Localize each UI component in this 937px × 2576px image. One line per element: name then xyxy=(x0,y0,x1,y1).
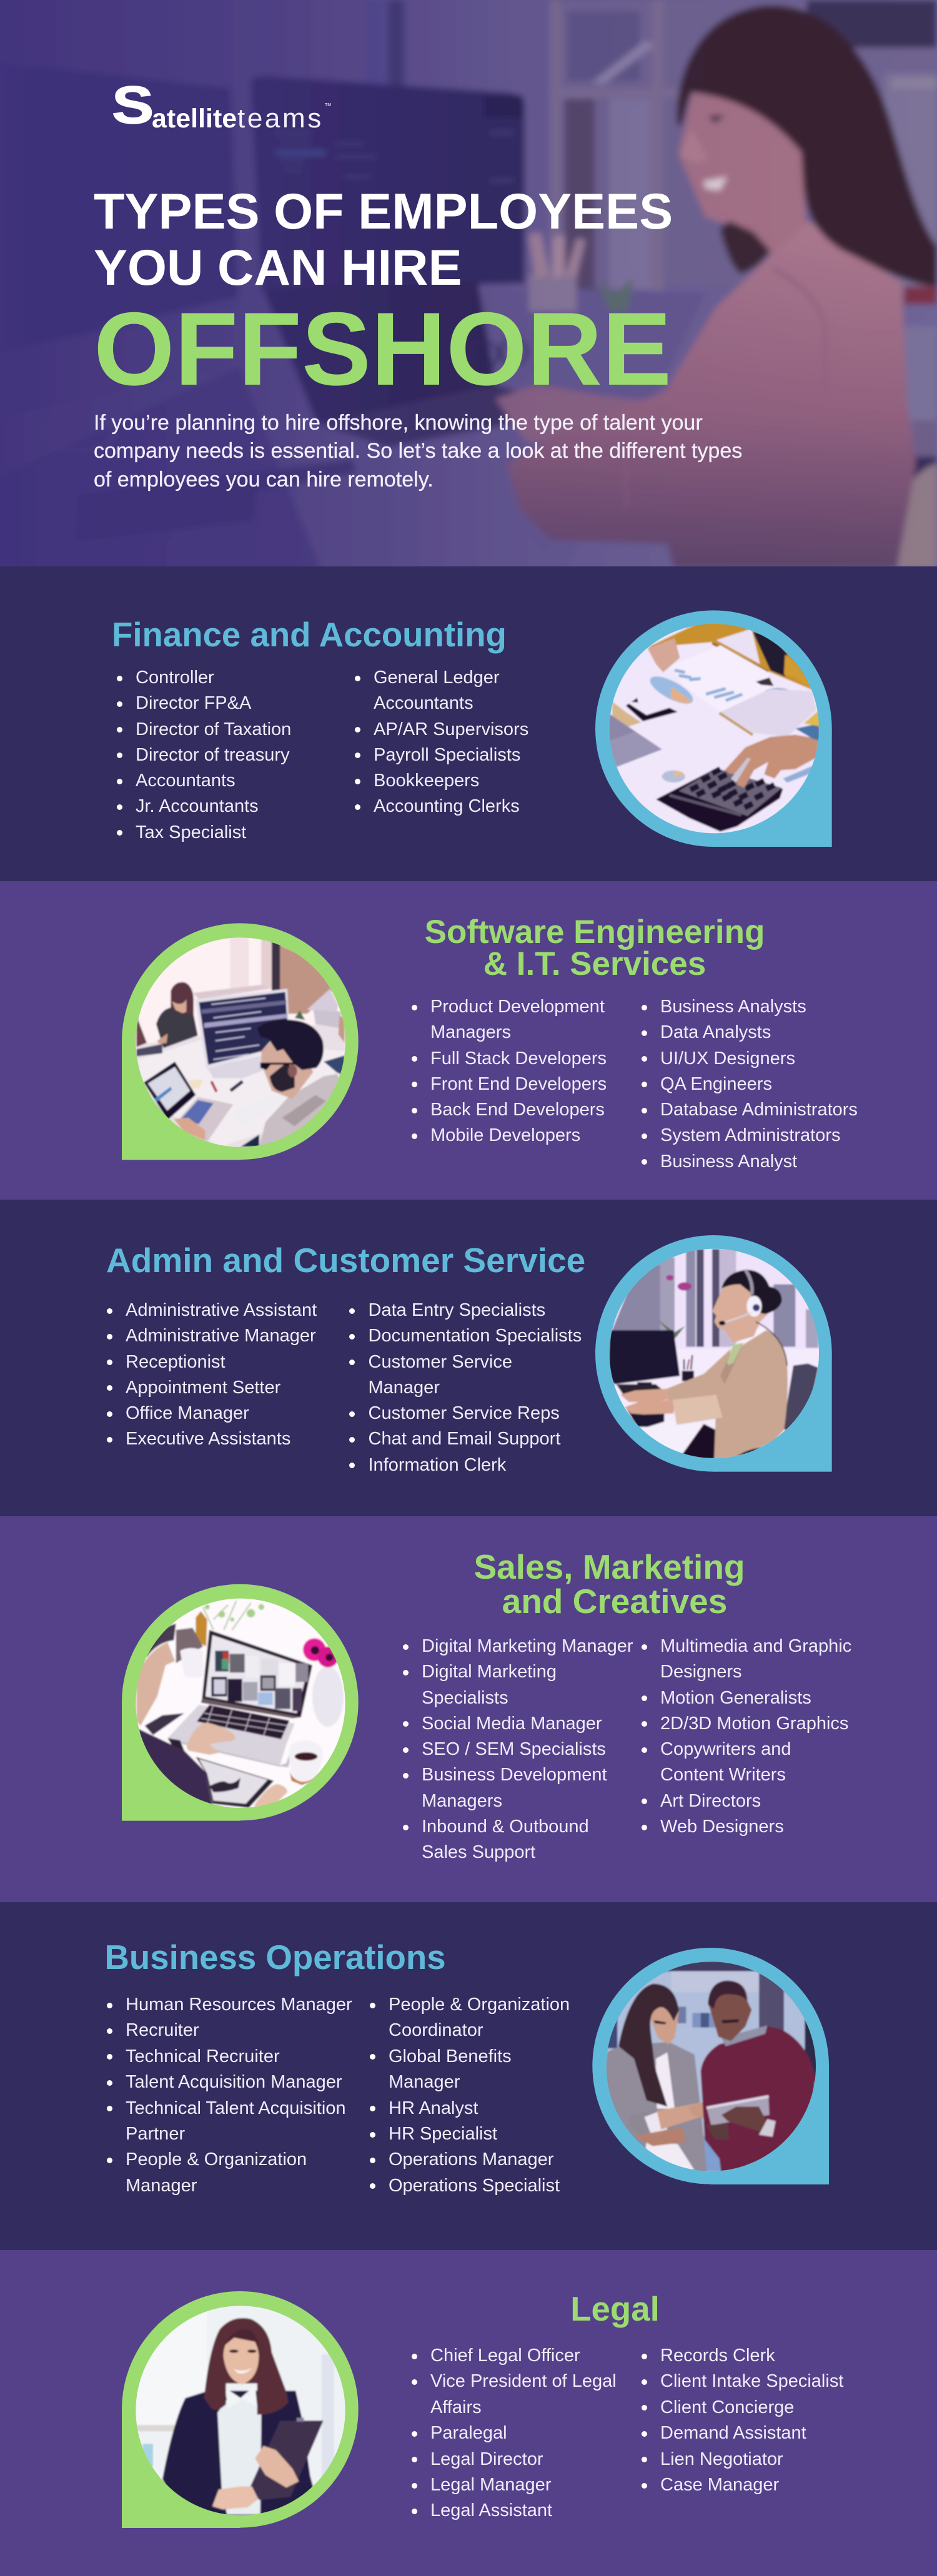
list: software column 1: Mobile Developers xyxy=(430,1125,580,1145)
photo badge: call-centre agent with headset at a keyboard xyxy=(595,1235,832,1472)
list: admin column 2: Manager xyxy=(369,1378,440,1398)
list: operations column 2: Operations Manager xyxy=(389,2149,553,2169)
list: finance column 1: Director FP&A xyxy=(136,693,251,713)
list: finance column 1 xyxy=(117,668,291,842)
list: admin column 1: Administrative Assistant xyxy=(126,1300,317,1320)
heading: sales marketing and creatives: and Creatives xyxy=(502,1581,727,1620)
list: admin column 1 xyxy=(107,1300,317,1449)
intro text xyxy=(94,411,742,491)
list: operations column 1: Human Resources Manager xyxy=(126,1995,352,2015)
list: legal column 1: Affairs xyxy=(430,2397,482,2417)
list: legal column 2: Lien Negotiator xyxy=(660,2449,783,2469)
list: sales column 2: Motion Generalists xyxy=(660,1688,811,1708)
panel: sales marketing and creatives xyxy=(0,1516,937,1902)
list: legal column 1: Legal Director xyxy=(430,2449,543,2469)
list: sales column 1: Sales Support xyxy=(422,1842,535,1862)
list: admin column 2: Data Entry Specialists xyxy=(369,1300,545,1320)
list: operations column 2: People & Organization xyxy=(389,1995,570,2015)
photo badge: smiling lawyer holding a clipboard xyxy=(122,2291,359,2528)
list: operations column 1: Technical Recruiter xyxy=(126,2046,280,2066)
list: software column 1: Managers xyxy=(430,1022,511,1042)
list: operations column 2: HR Specialist xyxy=(389,2124,497,2144)
heading: sales marketing and creatives xyxy=(473,1547,745,1620)
list: operations column 2: Global Benefits xyxy=(389,2046,512,2066)
list: admin column 1: Executive Assistants xyxy=(126,1429,290,1449)
logo: Satelliteteams xyxy=(112,76,331,134)
panel: legal xyxy=(0,2250,937,2576)
list: admin column 1: Administrative Manager xyxy=(126,1326,316,1346)
list: operations column 1: Technical Talent Acquisition xyxy=(126,2098,346,2118)
list: legal column 1: Paralegal xyxy=(430,2423,507,2443)
list: sales column 2: Designers xyxy=(660,1662,742,1682)
list: operations column 1: Talent Acquisition Manager xyxy=(126,2072,342,2092)
list: finance column 2: General Ledger xyxy=(374,668,500,688)
list: operations column 1 xyxy=(107,1995,352,2196)
list: sales column 1: Social Media Manager xyxy=(422,1714,602,1734)
title: types of employees: TYPES OF EMPLOYEES xyxy=(94,184,673,240)
list: operations column 1: Recruiter xyxy=(126,2020,199,2040)
list: finance column 1: Tax Specialist xyxy=(136,822,246,842)
list: software column 2: Business Analysts xyxy=(660,997,806,1017)
heading: admin and customer service: Admin and Customer Service xyxy=(106,1241,585,1280)
list: operations column 2 xyxy=(370,1995,570,2196)
list: sales column 1: SEO / SEM Specialists xyxy=(422,1739,606,1759)
logo: Satelliteteams: TM xyxy=(325,103,331,107)
logo: Satelliteteams: teams xyxy=(237,103,324,134)
panel: finance and accounting xyxy=(114,610,832,847)
list: sales column 1: Digital Marketing Manager xyxy=(422,1636,633,1656)
heading: legal: Legal xyxy=(570,2290,660,2328)
list: admin column 1: Office Manager xyxy=(126,1403,249,1423)
intro text: company needs is essential. So let’s take a look at the different types xyxy=(94,439,742,463)
list: sales column 1: Specialists xyxy=(422,1688,508,1708)
list: operations column 1: People & Organization xyxy=(126,2149,307,2169)
list: finance column 2: AP/AR Supervisors xyxy=(374,719,528,739)
list: legal column 2: Records Clerk xyxy=(660,2346,775,2366)
list: software column 2: Database Administrators xyxy=(660,1100,858,1120)
list: legal column 2 xyxy=(642,2346,843,2495)
list: operations column 2: HR Analyst xyxy=(389,2098,478,2118)
logo: Satelliteteams: atellite xyxy=(152,104,237,134)
list: legal column 1 xyxy=(412,2346,617,2520)
list: sales column 1: Business Development xyxy=(422,1765,607,1785)
list: legal column 1: Vice President of Legal xyxy=(430,2371,617,2391)
list: legal column 1: Legal Manager xyxy=(430,2475,551,2495)
list: finance column 1: Director of Taxation xyxy=(136,719,291,739)
list: finance column 2: Accountants xyxy=(374,693,473,713)
list: software column 2: Data Analysts xyxy=(660,1022,771,1042)
hero photo: woman at computer with purple overlay xyxy=(0,0,937,566)
photo badge: designer browsing on a laptop with coffee and flowers xyxy=(122,1584,359,1821)
list: software column 1: Product Development xyxy=(430,997,605,1017)
title: types of employees: YOU CAN HIRE xyxy=(94,240,462,296)
list: sales column 2: Copywriters and xyxy=(660,1739,791,1759)
list: admin column 1: Appointment Setter xyxy=(126,1378,280,1398)
list: legal column 2: Client Concierge xyxy=(660,2397,794,2417)
heading: business operations: Business Operations xyxy=(105,1938,446,1976)
intro text: If you’re planning to hire offshore, knowing the type of talent your xyxy=(94,411,703,435)
list: software column 2: UI/UX Designers xyxy=(660,1049,795,1068)
title: types of employees xyxy=(94,184,673,296)
logo: Satelliteteams: S xyxy=(112,76,154,134)
panel: business operations xyxy=(107,1945,829,2195)
list: finance column 1: Accountants xyxy=(136,771,235,791)
list: software column 1: Back End Developers xyxy=(430,1100,605,1120)
list: software column 2 xyxy=(642,997,858,1172)
list: sales column 2: Art Directors xyxy=(660,1791,761,1811)
list: operations column 2: Operations Specialist xyxy=(389,2176,560,2196)
title: offshore: OFFSHORE xyxy=(94,291,672,407)
list: sales column 1 xyxy=(403,1636,633,1862)
list: software column 2: QA Engineers xyxy=(660,1074,772,1094)
heading: software engineering and IT services xyxy=(425,914,765,982)
list: operations column 2: Coordinator xyxy=(389,2020,483,2040)
list: admin column 2: Chat and Email Support xyxy=(369,1429,560,1449)
list: software column 2: Business Analyst xyxy=(660,1152,797,1172)
photo badge: hands using calculator over financial charts xyxy=(595,610,832,847)
list: finance column 2: Accounting Clerks xyxy=(374,796,520,816)
list: sales column 2: Content Writers xyxy=(660,1765,786,1785)
list: legal column 1: Legal Assistant xyxy=(430,2500,552,2520)
list: admin column 2: Information Clerk xyxy=(369,1455,506,1475)
list: finance column 2 xyxy=(355,668,528,816)
list: legal column 2: Demand Assistant xyxy=(660,2423,806,2443)
list: admin column 2: Customer Service xyxy=(369,1352,512,1372)
list: software column 2: System Administrators xyxy=(660,1125,840,1145)
list: sales column 2: Multimedia and Graphic xyxy=(660,1636,851,1656)
list: sales column 2 xyxy=(642,1636,851,1837)
heading: software engineering and IT services: Software Engineering xyxy=(425,914,765,950)
list: operations column 1: Partner xyxy=(126,2124,185,2144)
list: legal column 1: Chief Legal Officer xyxy=(430,2346,580,2366)
list: admin column 2 xyxy=(349,1300,582,1475)
list: software column 1: Front End Developers xyxy=(430,1074,607,1094)
list: legal column 2: Case Manager xyxy=(660,2475,779,2495)
list: admin column 2: Documentation Specialists xyxy=(369,1326,582,1346)
list: legal column 2: Client Intake Specialist xyxy=(660,2371,843,2391)
list: sales column 1: Managers xyxy=(422,1791,502,1811)
list: sales column 2: 2D/3D Motion Graphics xyxy=(660,1714,848,1734)
panel: hero header xyxy=(0,0,937,566)
list: admin column 2: Customer Service Reps xyxy=(369,1403,560,1423)
list: operations column 1: Manager xyxy=(126,2176,197,2196)
list: finance column 2: Payroll Specialists xyxy=(374,745,520,765)
list: software column 1: Full Stack Developers xyxy=(430,1049,607,1068)
intro text: of employees you can hire remotely. xyxy=(94,468,434,491)
heading: software engineering and IT services: & I.T. Services xyxy=(483,945,706,982)
list: finance column 2: Bookkeepers xyxy=(374,771,479,791)
panel: admin and customer service xyxy=(107,1235,832,1472)
photo badge: developers at a shared desk with monitor xyxy=(122,923,359,1160)
list: finance column 1: Director of treasury xyxy=(136,745,290,765)
list: admin column 1: Receptionist xyxy=(126,1352,226,1372)
heading: finance and accounting: Finance and Accounting xyxy=(112,616,507,654)
list: sales column 1: Digital Marketing xyxy=(422,1662,557,1682)
list: operations column 2: Manager xyxy=(389,2072,460,2092)
panel: software engineering xyxy=(0,881,937,1200)
heading: sales marketing and creatives: Sales, Marketing xyxy=(473,1547,745,1586)
list: software column 1 xyxy=(412,997,607,1145)
list: sales column 2: Web Designers xyxy=(660,1817,784,1837)
photo badge: two colleagues reviewing a tablet xyxy=(592,1948,829,2184)
list: sales column 1: Inbound & Outbound xyxy=(422,1817,589,1837)
list: finance column 1: Controller xyxy=(136,668,214,688)
list: finance column 1: Jr. Accountants xyxy=(136,796,259,816)
